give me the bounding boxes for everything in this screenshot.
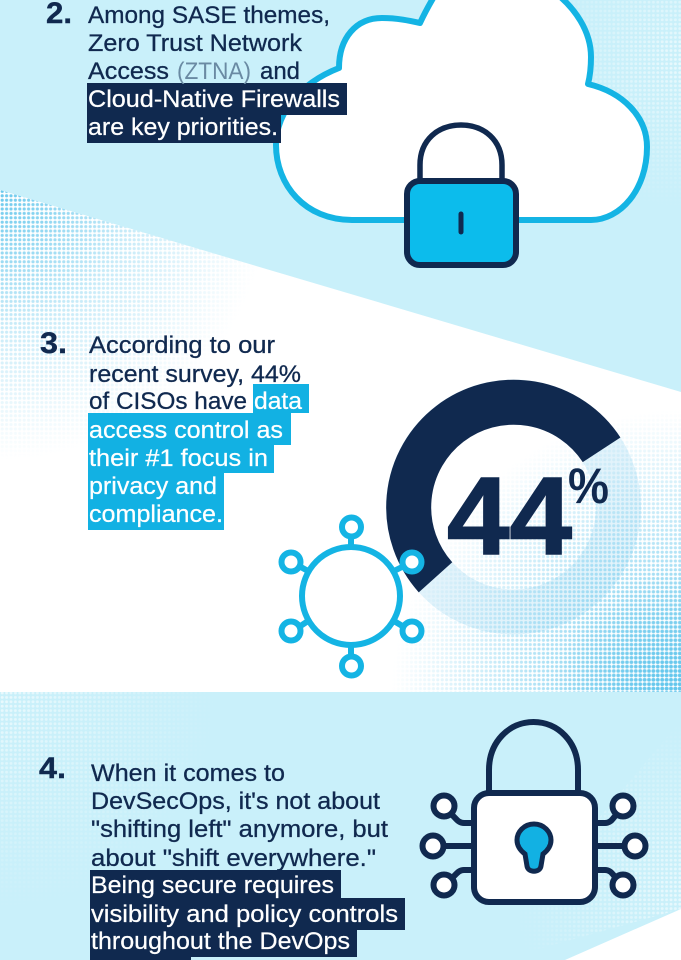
text block: item 3: recent survey, 44% xyxy=(89,361,301,388)
text block: item 4: about "shift everywhere." xyxy=(91,845,376,872)
text block: item 2: are key priorities. xyxy=(88,114,278,141)
text block: item 4 xyxy=(91,760,398,955)
text block: item 4: "shifting left" anymore, but xyxy=(91,816,388,843)
text block: item 2: Cloud-Native Firewalls xyxy=(88,86,340,113)
icon: network hub xyxy=(282,518,422,676)
text block: item 4: When it comes to xyxy=(91,760,285,787)
text block: item 4: Being secure requires xyxy=(91,872,334,899)
highlight: visibility and policy controls xyxy=(90,870,405,960)
text block: item 4: throughout the DevOps xyxy=(91,928,350,955)
icon: cloud with padlock xyxy=(276,0,647,265)
text block: item 3: According to our xyxy=(89,332,275,359)
panel: item 3 data access control xyxy=(40,327,609,676)
donut value: % xyxy=(568,458,609,514)
text block: item 3: of CISOs have xyxy=(89,388,247,415)
text block: item 3: compliance. xyxy=(89,501,223,528)
donut value: 44 xyxy=(447,455,572,578)
text block: item 2: Among SASE themes, xyxy=(88,2,330,29)
text block: item 2: and xyxy=(260,58,300,85)
text block: item 2 xyxy=(88,2,340,141)
text block: item 2: (ZTNA) xyxy=(177,58,251,85)
text block: item 3: their #1 focus in xyxy=(89,445,268,472)
highlight: data access control xyxy=(88,384,309,530)
panel: item 2 cloud security xyxy=(46,0,647,265)
number 4: 4. xyxy=(39,752,66,785)
panel: item 4 DevSecOps xyxy=(39,722,646,960)
text block: item 3: data xyxy=(254,388,303,415)
text block: item 3: access control as xyxy=(89,417,283,444)
text block: item 2: Zero Trust Network xyxy=(88,30,303,57)
icon: padlock with circuit nodes xyxy=(422,722,646,902)
highlight: cloud-native firewalls xyxy=(87,83,347,143)
number 3: 3. xyxy=(40,327,67,360)
text block: item 3: privacy and xyxy=(89,473,217,500)
text block: item 4: DevSecOps, it's not about xyxy=(91,788,380,815)
chart: 44 percent donut xyxy=(409,402,602,577)
text block: item 3 xyxy=(89,332,303,528)
text block: item 2: Access xyxy=(88,58,169,85)
text block: item 4: visibility and policy controls xyxy=(91,901,398,928)
